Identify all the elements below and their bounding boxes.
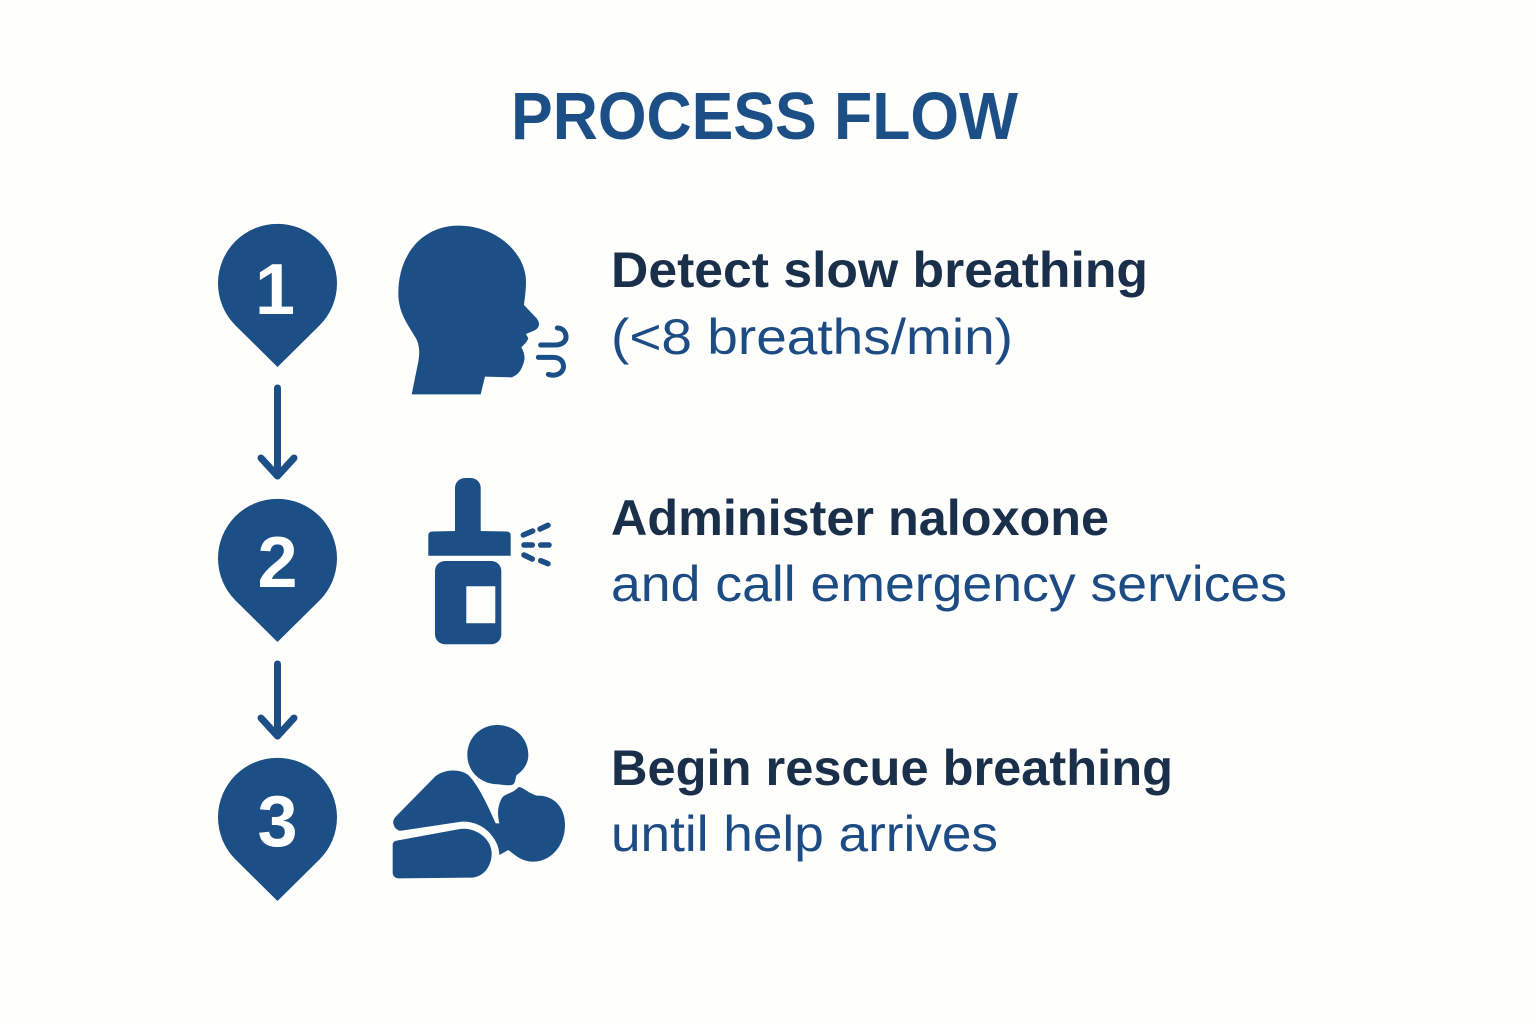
step 2 number pin: 2 <box>257 523 298 603</box>
step 3 heading: Begin rescue breathing <box>611 740 1173 796</box>
step 1 detail: (<8 breaths/min) <box>611 309 1013 365</box>
arrow: step 2 to step 3 <box>261 664 294 736</box>
step 1 <box>218 224 1148 394</box>
step 3 number pin <box>218 758 337 901</box>
step 2 <box>218 478 1287 644</box>
step 2 heading: Administer naloxone <box>611 490 1109 546</box>
step 3 detail: until help arrives <box>611 806 998 862</box>
step 3 <box>218 725 1173 901</box>
step 1 number pin <box>218 224 337 367</box>
icon: rescue breathing <box>393 725 565 878</box>
title: PROCESS FLOW <box>511 79 1019 154</box>
arrow: step 1 to step 2 <box>261 388 294 476</box>
icon: head exhaling breath <box>398 226 566 394</box>
step 2 detail: and call emergency services <box>611 556 1287 612</box>
step 2 number pin <box>218 499 337 642</box>
step 1 number pin: 1 <box>255 250 295 330</box>
step 3 number pin: 3 <box>257 782 298 862</box>
step 1 heading: Detect slow breathing <box>611 242 1148 298</box>
icon: nasal spray <box>428 478 549 644</box>
